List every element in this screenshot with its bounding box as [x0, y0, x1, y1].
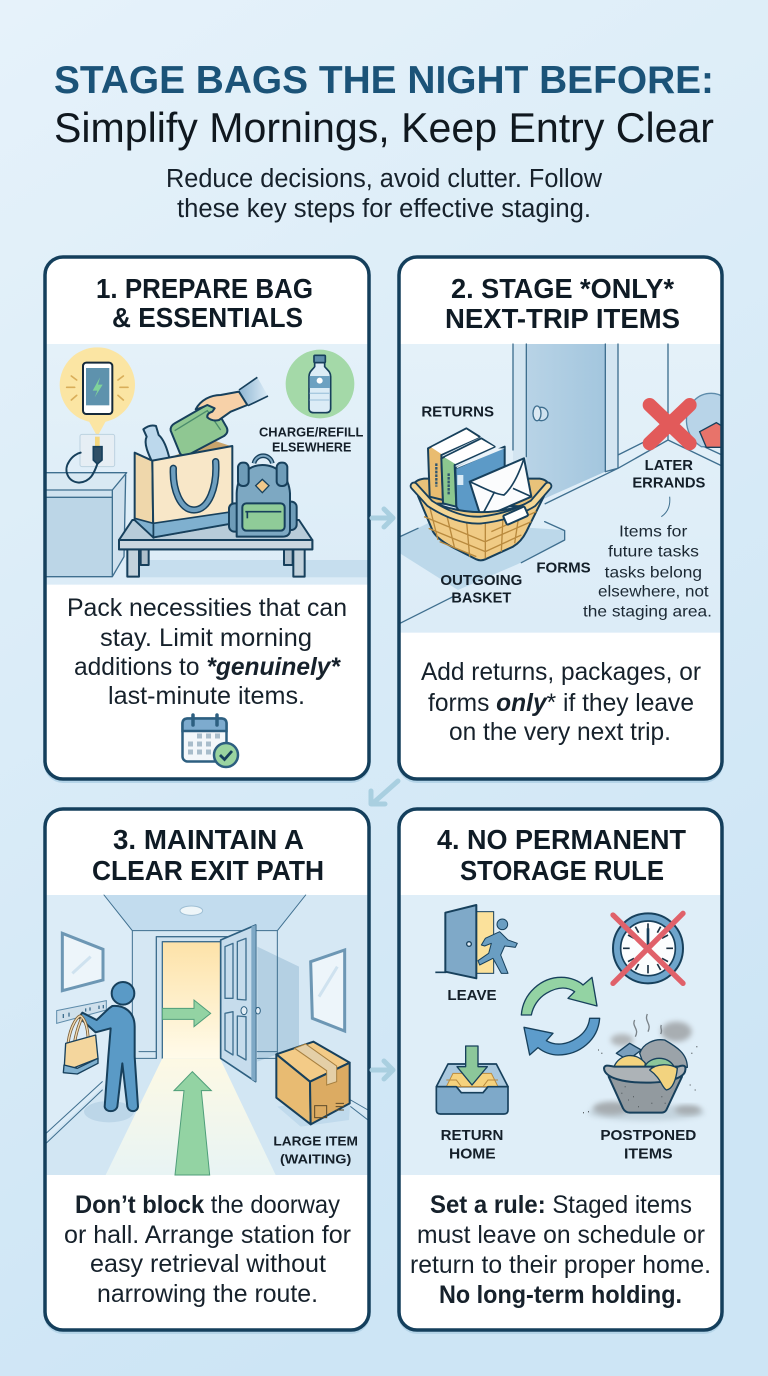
panel: 4 no permanent storage rule [398, 809, 723, 1334]
heading: panel 3: CLEAR EXIT PATH [92, 855, 324, 886]
icon: bag interior [168, 440, 231, 460]
label: return home: HOME [449, 1146, 496, 1162]
body text: panel 2: on the very next trip. [449, 718, 671, 746]
labels: panel 2: OUTGOING [440, 573, 522, 589]
body text: panel 1: additions to *genuinely* [74, 653, 341, 681]
note: items for future tasks: future tasks [608, 544, 699, 561]
icon: wicker basket [414, 486, 548, 560]
labels: panel 2 [421, 405, 705, 607]
body text: panel 3: or hall. Arrange station for [64, 1221, 351, 1249]
note: items for future tasks: the staging area. [583, 604, 712, 621]
icon: tote bag on hook [63, 1016, 98, 1074]
heading: panel 2 [445, 273, 680, 334]
body text: panel 2: Add returns, packages, or [421, 658, 701, 686]
label: postponed items: ITEMS [624, 1146, 673, 1162]
icon: door [513, 344, 722, 513]
icon: hallway walls and floor [46, 895, 368, 1175]
subtitle: Reduce decisions, avoid clutter. Follow [166, 165, 603, 193]
body text: panel 4 [410, 1191, 711, 1309]
panel: 1 prepare bag [44, 257, 370, 783]
note: items for future tasks [583, 524, 712, 621]
note: items for future tasks: Items for [619, 524, 688, 541]
label: charge and refill elsewhere [259, 425, 363, 455]
heading: panel 2: NEXT-TRIP ITEMS [445, 303, 680, 334]
label: postponed items [600, 1128, 696, 1162]
subtitle [166, 165, 603, 223]
arrow: cycle green [521, 977, 597, 1015]
icon: later errands items crossed out [650, 393, 722, 447]
body text: panel 3: Don’t block the doorway [75, 1191, 340, 1219]
labels: panel 2: FORMS [536, 561, 591, 577]
heading: panel 4: 4. NO PERMANENT [437, 824, 686, 855]
icon: bench [119, 520, 312, 577]
body text: panel 4: return to their proper home. [410, 1251, 711, 1279]
icon: bright open doorway [106, 937, 276, 1175]
body text: panel 4: must leave on schedule or [417, 1221, 705, 1249]
body text: panel 1: stay. Limit morning [100, 624, 312, 652]
icon: backpack [229, 456, 297, 537]
arrow: green up arrow [174, 1072, 211, 1175]
icon: tote bag [135, 446, 232, 537]
heading: panel 4: STORAGE RULE [460, 855, 664, 886]
arrow: step 1 to step 2 [372, 509, 393, 527]
icon: water bottle [286, 350, 354, 418]
heading: panel 3: 3. MAINTAIN A [113, 824, 304, 855]
icon: return home tray [436, 1046, 508, 1114]
note: items for future tasks: elsewhere, not [598, 584, 709, 601]
label: postponed items: POSTPONED [600, 1128, 696, 1144]
icon: floor mat [400, 522, 565, 623]
arrow: step 3 to step 4 [372, 1061, 393, 1079]
icon: cardboard box [276, 1042, 351, 1127]
label: large item waiting [273, 1134, 358, 1166]
heading: panel 1: & ESSENTIALS [112, 302, 303, 333]
heading: panel 2: 2. STAGE *ONLY* [451, 273, 674, 304]
body text: panel 1 [67, 594, 347, 710]
arrow: step 2 to step 3 [371, 781, 398, 804]
icon: green pouch and hand [171, 377, 268, 456]
body text: panel 3: easy retrieval without [90, 1250, 326, 1278]
illustration: bag on bench [46, 344, 368, 585]
arrow: cycle blue [524, 1018, 600, 1055]
label: large item waiting: LARGE ITEM [273, 1134, 358, 1149]
body text: panel 4: No long-term holding. [439, 1281, 682, 1309]
icon: envelope [470, 458, 531, 518]
icon: basket back rim [413, 479, 549, 507]
icon: person retrieving bag [79, 982, 138, 1122]
panel: 3 maintain a clear exit path [44, 809, 370, 1334]
heading: panel 3 [92, 824, 324, 886]
icon: dusty basket of postponed items [583, 1014, 705, 1121]
subtitle: these key steps for effective staging. [177, 195, 591, 223]
body text: panel 3 [64, 1191, 351, 1308]
icon: water bottle in bag [143, 425, 170, 466]
icon: open door [221, 925, 260, 1082]
panel: 2 stage only next-trip items [398, 257, 723, 783]
illustration: leave or return cycle [400, 895, 722, 1175]
icon: charging phone [60, 347, 135, 483]
body text: panel 3: narrowing the route. [97, 1280, 318, 1308]
icon: mirrors [62, 933, 345, 1031]
label: return home: RETURN [441, 1128, 503, 1144]
note: items for future tasks: tasks belong [605, 564, 702, 581]
title: STAGE BAGS THE NIGHT BEFORE: [54, 59, 714, 102]
icon: calendar with check [182, 715, 238, 767]
icon: person leaving door [435, 905, 517, 978]
title: Simplify Mornings, Keep Entry Clear [54, 104, 714, 151]
label: leave: LEAVE [447, 988, 497, 1004]
body text: panel 2: forms only* if they leave [428, 689, 694, 717]
heading: panel 4 [437, 824, 686, 886]
illustration: doorway with basket [400, 344, 722, 633]
title [54, 59, 714, 151]
labels: panel 2: BASKET [451, 591, 512, 607]
label: charge and refill elsewhere: ELSEWHERE [272, 440, 351, 455]
label: return home [441, 1128, 503, 1162]
heading: panel 1: 1. PREPARE BAG [96, 273, 313, 304]
icon: clock crossed out [613, 913, 683, 983]
labels: panel 2: LATER [645, 458, 694, 474]
label: large item waiting: (WAITING) [280, 1151, 351, 1166]
label: charge and refill elsewhere: CHARGE/REFILL [259, 425, 363, 440]
icon: cabinet [46, 473, 127, 577]
labels: panel 2: ERRANDS [632, 476, 705, 492]
body text: panel 1: Pack necessities that can [67, 594, 347, 622]
body text: panel 4: Set a rule: Staged items [430, 1191, 692, 1219]
illustration: hallway [46, 895, 368, 1175]
heading: panel 1 [96, 273, 313, 333]
labels: panel 2: RETURNS [421, 405, 494, 421]
arrow: green right arrow [162, 1000, 211, 1027]
icon: hook rack [57, 1001, 106, 1023]
body text: panel 2 [421, 658, 701, 746]
body text: panel 1: last-minute items. [108, 682, 305, 710]
icon: books [428, 428, 505, 520]
